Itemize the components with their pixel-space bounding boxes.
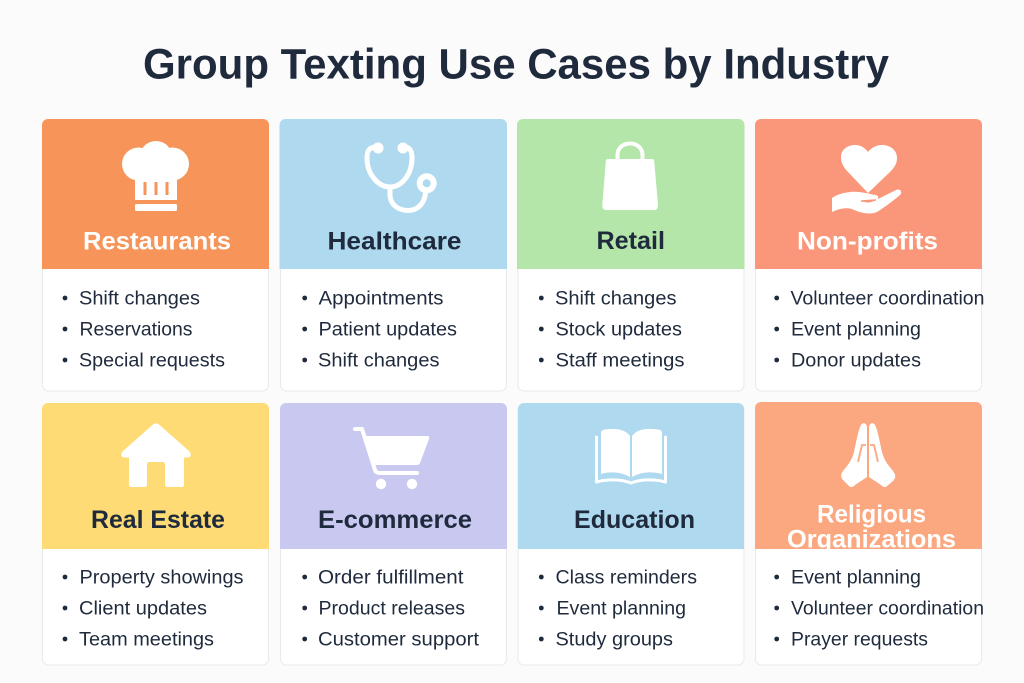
header: real estate (42, 403, 269, 549)
heading: religious organizations: Religious (817, 500, 926, 528)
heading: restaurants: Restaurants (83, 228, 231, 256)
heading: non-profits: Non-profits (797, 228, 938, 256)
list: restaurants: Shift changes (79, 288, 200, 310)
panel: restaurants (42, 119, 269, 391)
icon: chef hat (122, 141, 189, 211)
heading: education: Education (574, 506, 695, 534)
icon: heart in hand (832, 145, 901, 213)
list: healthcare: Appointments (318, 288, 444, 310)
list: retail: Stock updates (556, 320, 682, 340)
list: real estate: Team meetings (79, 630, 214, 650)
panel: retail (517, 119, 744, 391)
list: restaurants (63, 288, 225, 372)
list: healthcare (302, 288, 457, 372)
header: healthcare (280, 119, 507, 269)
list: restaurants: Reservations (80, 320, 192, 340)
icon: shopping bag (602, 144, 658, 210)
title: Group Texting Use Cases by Industry (143, 40, 889, 88)
list: education: Event planning (556, 598, 686, 620)
list: non-profits: Event planning (791, 320, 921, 340)
list: education: Study groups (556, 630, 673, 650)
icon: praying hands (841, 423, 895, 487)
panel: e-commerce (280, 403, 507, 665)
icon: stethoscope (367, 142, 434, 210)
list: non-profits: Volunteer coordination (790, 288, 984, 310)
list: restaurants: Special requests (79, 350, 225, 372)
list: retail (539, 288, 684, 372)
list: e-commerce: Product releases (318, 598, 465, 620)
list: non-profits (774, 288, 984, 372)
panel: religious organizations (755, 402, 984, 665)
list: religious organizations: Event planning (791, 568, 921, 588)
list: education (539, 568, 697, 650)
list: healthcare: Shift changes (318, 350, 440, 372)
body: religious organizations (755, 549, 982, 665)
header: education (518, 403, 744, 549)
list: religious organizations: Prayer requests (791, 630, 928, 650)
list: e-commerce: Customer support (318, 630, 480, 650)
panel: education (518, 403, 744, 665)
list: real estate (63, 568, 243, 650)
icon: shopping cart (355, 429, 429, 489)
list: non-profits: Donor updates (791, 350, 921, 372)
icon: house (121, 423, 191, 487)
header: restaurants (42, 119, 269, 269)
list: retail: Shift changes (555, 288, 676, 310)
list: real estate: Property showings (80, 568, 244, 588)
header: e-commerce (280, 403, 507, 549)
header: religious organizations (755, 402, 982, 549)
list: e-commerce (302, 568, 480, 650)
heading: real estate: Real Estate (91, 506, 225, 534)
panel: real estate (42, 403, 269, 665)
heading: religious organizations: Organizations (787, 526, 956, 554)
heading: religious organizations (787, 500, 956, 554)
heading: e-commerce: E-commerce (318, 506, 472, 534)
list: religious organizations: Volunteer coordination (791, 598, 984, 620)
heading: healthcare: Healthcare (328, 228, 462, 256)
list: religious organizations (774, 568, 984, 650)
list: e-commerce: Order fulfillment (318, 568, 464, 588)
header: retail (517, 119, 744, 269)
icon: open book (596, 429, 666, 483)
list: healthcare: Patient updates (318, 320, 457, 340)
list: education: Class reminders (556, 568, 697, 588)
list: retail: Staff meetings (556, 350, 684, 372)
heading: retail: Retail (596, 227, 665, 255)
list: real estate: Client updates (79, 598, 207, 620)
panel: non-profits (755, 119, 984, 391)
panel: healthcare (280, 119, 507, 391)
header: non-profits (755, 119, 982, 269)
